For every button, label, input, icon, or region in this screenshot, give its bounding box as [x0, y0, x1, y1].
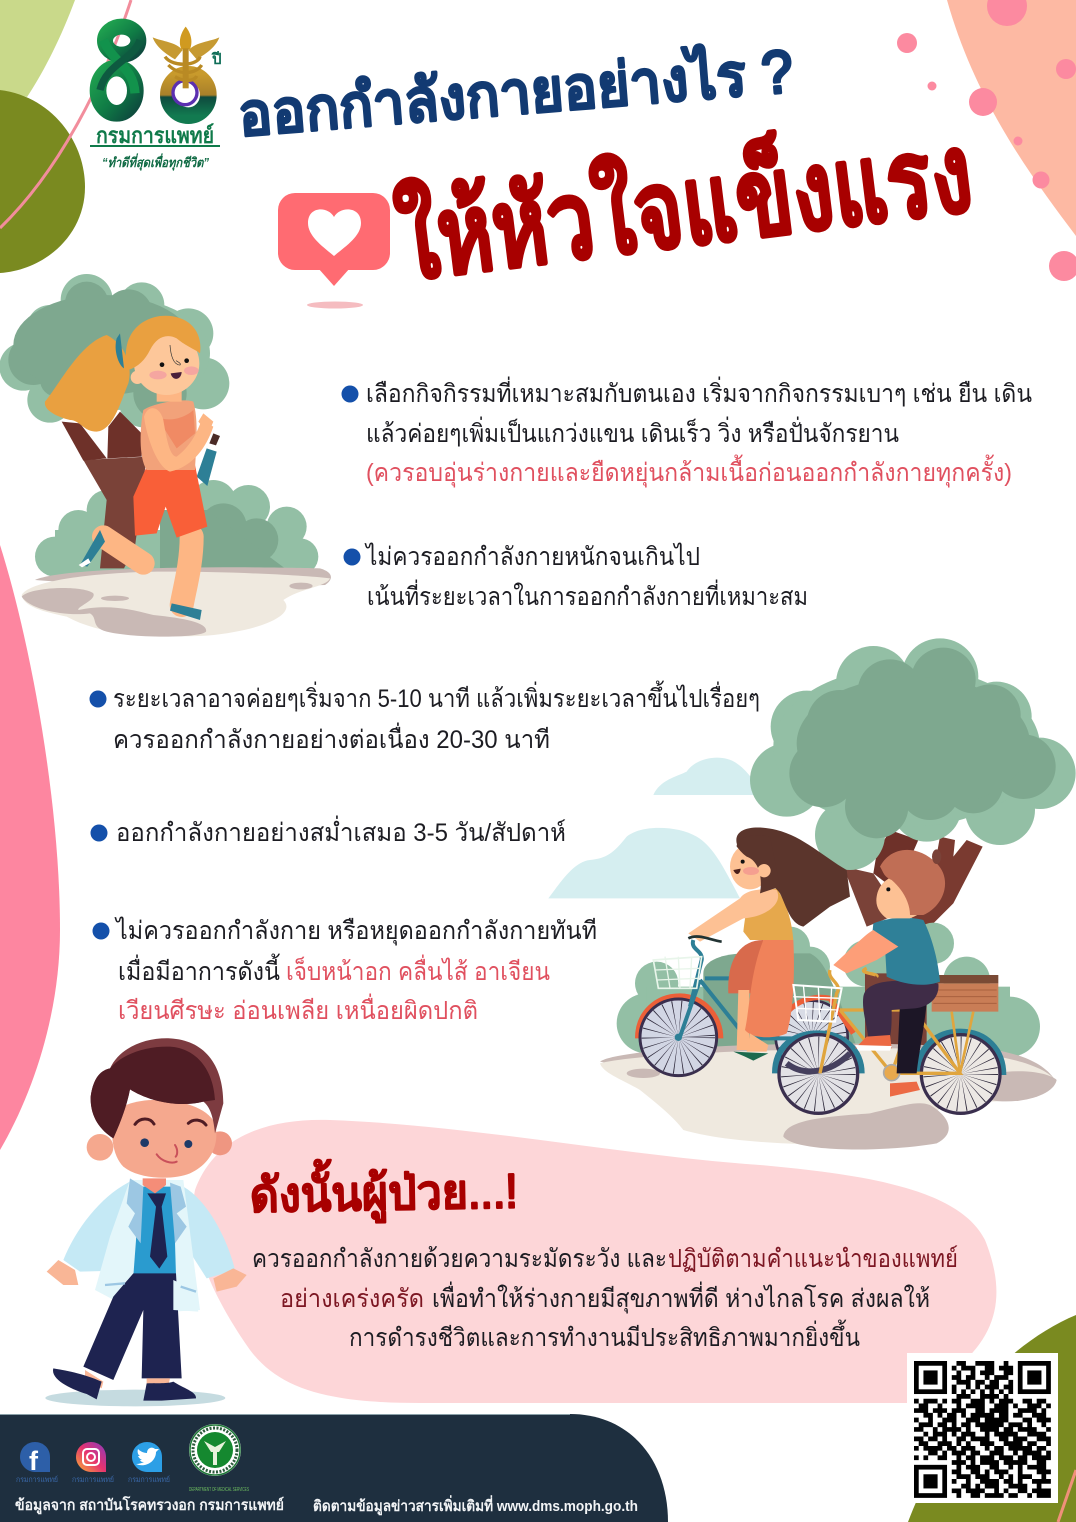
icon: instagram: [76, 1442, 106, 1472]
icon: Ministry of Public Health seal: [189, 1424, 249, 1493]
icon: heart speech bubble: [278, 193, 390, 308]
bullet 1: (ควรอบอุ่นร่างกายและยืดหยุ่นกล้ามเนื้อก่อนออกกำลังกายทุกครั้ง): [366, 454, 1012, 488]
callout body text: ควรออกกำลังกายด้วยความระมัดระวัง และ: [252, 1245, 667, 1273]
callout heading: ดังนั้นผู้ป่วย...!: [249, 1156, 518, 1225]
girl cycling: [653, 828, 850, 1061]
QR code: [907, 1353, 1058, 1503]
footer website text: ติดตามข้อมูลข่าวสารเพิ่มเติมที่ www.dms.moph.go.th: [313, 1495, 638, 1516]
callout body text: เพื่อทำให้ร่างกายมีสุขภาพที่ดี ห่างไกลโรค ส่งผลให้: [432, 1281, 930, 1314]
boy cycling: [793, 849, 998, 1097]
social labels: กรมการแพทย์: [128, 1475, 170, 1484]
title: line 2: ให้หัวใจแข็งแรง: [390, 108, 979, 304]
girl's bicycle front wheel: [638, 997, 720, 1076]
bullet 2: เน้นที่ระยะเวลาในการออกกำลังกายที่เหมาะสม: [367, 579, 808, 611]
bullet 3: ควรออกกำลังกายอย่างต่อเนื่อง 20-30 นาที: [113, 722, 550, 754]
bullet 1: เลือกกิจกิรรมที่เหมาะสมกับตนเอง เริ่มจากกิจกรรมเบาๆ เช่น ยืน เดิน: [366, 376, 1032, 408]
bullet list: left column: [90, 680, 760, 1025]
bullet 5: ไม่ควรออกกำลังกาย หรือหยุดออกกำลังกายทันที: [114, 916, 597, 946]
icon: facebook: f: [29, 1446, 39, 1476]
bullet 3: ระยะเวลาอาจค่อยๆเริ่มจาก 5-10 นาที แล้วเพิ่มระยะเวลาขึ้นไปเรื่อยๆ: [113, 680, 760, 713]
bullet 5: เจ็บหน้าอก คลื่นไส้ อาเจียน: [286, 954, 550, 986]
callout body text: ปฏิบัติตามคำแนะนำของแพทย์: [668, 1245, 958, 1273]
callout body text: การดำรงชีวิตและการทำงานมีประสิทธิภาพมากยิ่งขึ้น: [349, 1319, 860, 1352]
logo: 80 years Department of Medical Services: ปี: [211, 51, 222, 68]
icon: facebook: [20, 1442, 50, 1476]
bullet 5: [92, 916, 597, 1025]
illustration: two people cycling under tree: [548, 638, 1076, 1149]
panel: pink callout: [193, 1120, 996, 1403]
background: left pink shape: [0, 545, 60, 1150]
background: bottom-right olive shape: [908, 1315, 1076, 1522]
boy's bicycle wheels: [775, 1032, 1003, 1113]
logo: 80 years Department of Medical Services: [90, 27, 222, 171]
bullet 5: เมื่อมีอาการดังนี้: [118, 953, 280, 986]
title: line 1: ออกกำลังกายอย่างไร ?: [236, 37, 795, 149]
icon: Ministry of Public Health seal: DEPARTMENT OF MEDICAL SERVICES: [189, 1487, 249, 1493]
footer bar: [0, 1414, 668, 1522]
social labels: กรมการแพทย์: [16, 1475, 58, 1484]
girl's bicycle rear wheel: [776, 997, 853, 1073]
icon: twitter: [132, 1442, 162, 1472]
footer source text: ข้อมูลจาก สถาบันโรคทรวงอก กรมการแพทย์: [15, 1495, 284, 1515]
illustration: girl jogging under tree: [0, 274, 331, 637]
logo: 80 years Department of Medical Services: “ทำดีที่สุดเพื่อทุกชีวิต”: [102, 153, 209, 171]
bullet 4: ออกกำลังกายอย่างสม่ำเสมอ 3-5 วัน/สัปดาห์: [116, 815, 566, 847]
social labels: [16, 1475, 170, 1484]
bullet 2: [344, 542, 808, 611]
bullet 1: [342, 376, 1032, 488]
bullet 1: แล้วค่อยๆเพิ่มเป็นแกว่งแขน เดินเร็ว วิ่ง หรือปั่นจักรยาน: [366, 416, 899, 448]
background: top-right peach shape and dots: [897, 0, 1076, 281]
callout body text: [252, 1245, 958, 1352]
bullet list: right column, top: [342, 376, 1032, 611]
bullet 2: ไม่ควรออกกำลังกายหนักจนเกินไป: [364, 542, 700, 571]
social labels: กรมการแพทย์: [72, 1475, 114, 1484]
logo: 80 years Department of Medical Services: กรมการแพทย์: [96, 123, 214, 148]
callout body text: อย่างเคร่งครัด: [280, 1285, 424, 1313]
illustration: doctor: [45, 1038, 247, 1406]
bullet 3: [90, 680, 760, 754]
background: top-left green shapes: [0, 0, 131, 273]
bullet 5: เวียนศีรษะ อ่อนเพลีย เหนื่อยผิดปกติ: [118, 993, 478, 1025]
